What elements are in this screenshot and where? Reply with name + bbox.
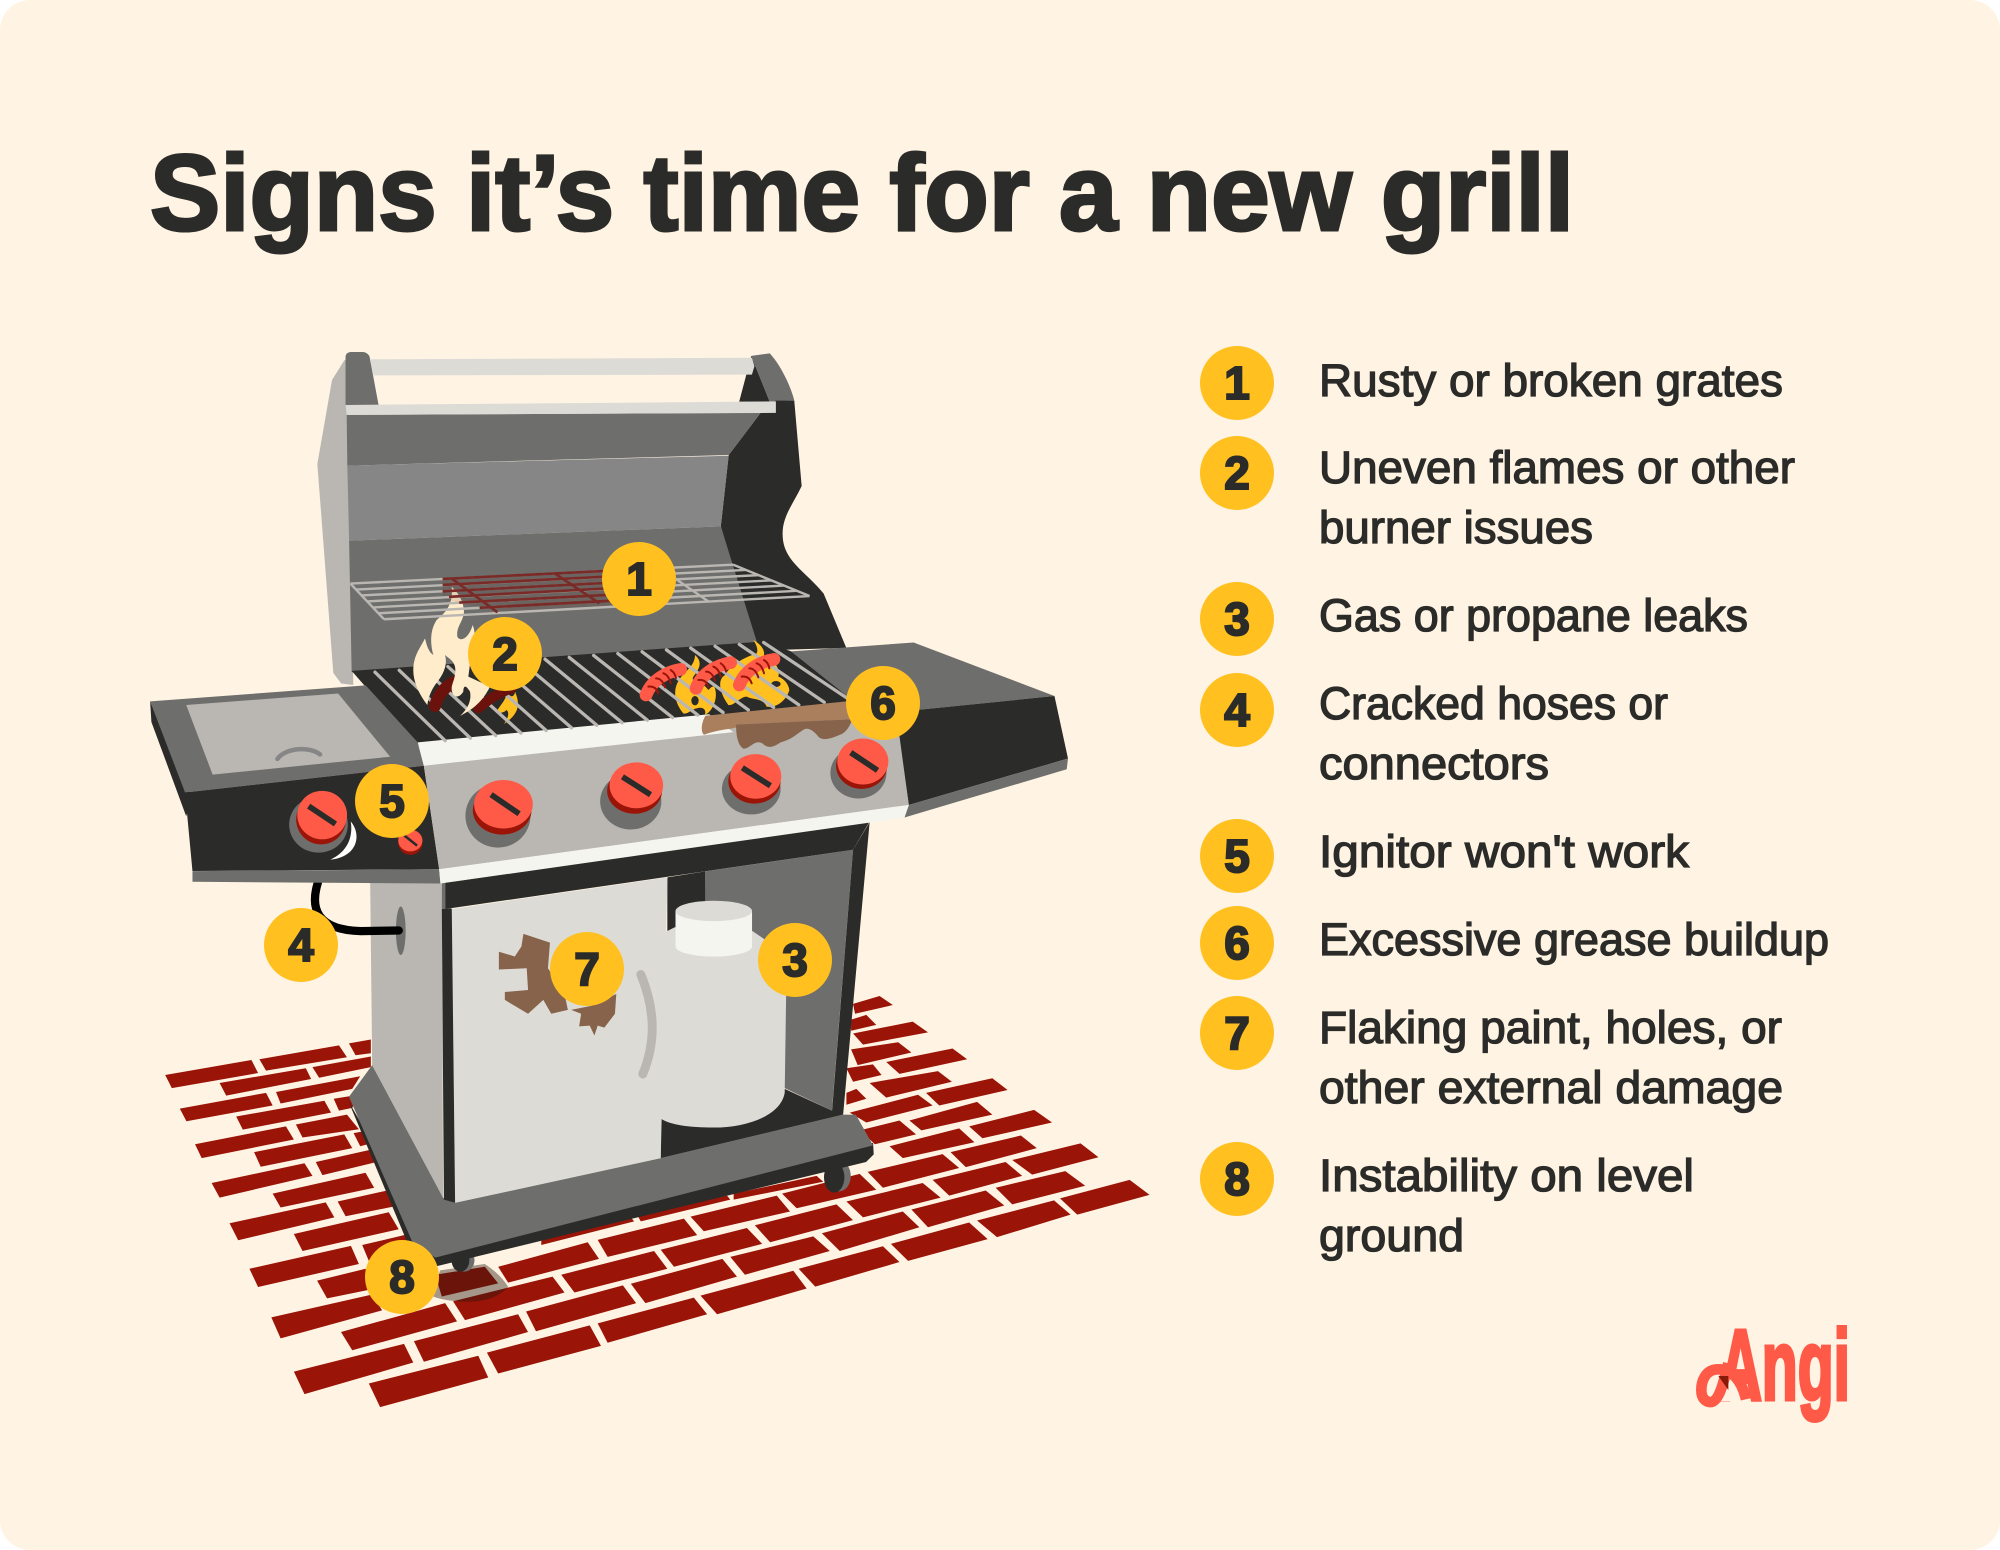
list item 8: ground <box>1319 1210 1464 1261</box>
list item 2: Uneven flames or other <box>1319 442 1795 493</box>
cabinet interior <box>661 822 870 1158</box>
list item 4: Cracked hoses or <box>1319 678 1668 729</box>
propane tank <box>641 901 787 1128</box>
list item 4: 4 <box>1224 684 1250 736</box>
ignitor spark arc <box>330 821 357 860</box>
list item 6 <box>1200 906 1829 980</box>
frame bar <box>445 821 870 909</box>
list item 5: 5 <box>1224 830 1250 882</box>
list item 4: connectors <box>1319 738 1549 789</box>
list item 3: 3 <box>1224 593 1250 645</box>
sausages <box>435 659 774 708</box>
grill lid <box>317 352 846 685</box>
caster shadow <box>432 1264 508 1302</box>
list item 2: 2 <box>1224 447 1250 499</box>
grease buildup <box>702 701 852 749</box>
grate bars <box>375 642 849 741</box>
cabinet side panel <box>370 880 455 1203</box>
knob <box>600 762 663 829</box>
flaking paint damage <box>499 934 616 1036</box>
number badge 5 <box>355 764 429 838</box>
number badge 2: 2 <box>492 628 518 680</box>
left side shelf <box>150 685 440 884</box>
sausage three <box>739 659 774 685</box>
list item 1: Rusty or broken grates <box>1319 355 1783 406</box>
list item 6: 6 <box>1224 917 1250 969</box>
list item 1: 1 <box>1224 357 1250 409</box>
Angi logo: Angi <box>1719 1309 1850 1421</box>
number badge 1 <box>602 542 676 616</box>
brick patio <box>165 996 1150 1407</box>
sausage one <box>646 669 681 695</box>
number badge 1: 1 <box>626 553 652 605</box>
list item 8 <box>1200 1142 1694 1261</box>
list item 7: other external damage <box>1319 1062 1783 1113</box>
knob <box>465 780 533 848</box>
list item 3 <box>1200 582 1748 656</box>
Angi logo <box>1701 1309 1850 1421</box>
number badge 4: 4 <box>288 919 314 971</box>
cart base <box>348 1065 874 1267</box>
number badge 5: 5 <box>379 775 405 827</box>
number badge 2 <box>468 617 542 691</box>
right side shelf <box>791 642 1068 817</box>
number badge 4 <box>264 908 338 982</box>
gas hose <box>315 883 399 931</box>
number badge 7: 7 <box>574 943 600 995</box>
control panel <box>418 705 909 884</box>
list item 4 <box>1200 673 1668 789</box>
list item 6: Excessive grease buildup <box>1319 914 1829 965</box>
list item 3: Gas or propane leaks <box>1319 590 1748 641</box>
burnt sausages <box>435 681 512 708</box>
list item 5 <box>1200 819 1690 893</box>
knob <box>830 739 888 798</box>
control knobs <box>289 739 888 860</box>
number badge 7 <box>550 932 624 1006</box>
knob <box>289 791 348 853</box>
grill illustration <box>150 352 1068 1302</box>
list item 7: Flaking paint, holes, or <box>1319 1002 1782 1053</box>
uneven cream flame <box>413 587 490 716</box>
list item 5: Ignitor won't work <box>1319 826 1690 877</box>
broken ignitor button <box>398 830 422 855</box>
number badge 8: 8 <box>389 1251 415 1303</box>
number badge 8 <box>365 1240 439 1314</box>
list item 2 <box>1200 436 1795 553</box>
number badge 6 <box>846 666 920 740</box>
cabinet door <box>452 877 667 1203</box>
upper warming rack <box>350 565 810 619</box>
number badge 3 <box>758 923 832 997</box>
knob <box>722 754 781 814</box>
list item 7 <box>1200 996 1783 1113</box>
list item 7: 7 <box>1224 1007 1250 1059</box>
yellow flames <box>497 640 789 724</box>
casters <box>452 1161 851 1272</box>
number badge 3: 3 <box>782 934 808 986</box>
list item 8: 8 <box>1224 1153 1250 1205</box>
sausage two <box>696 663 731 688</box>
rusty grate section <box>443 571 614 612</box>
list item 1 <box>1200 346 1783 420</box>
cooking chamber <box>352 641 855 746</box>
title: Signs it’s time for a new grill <box>150 132 1574 253</box>
number badge 6: 6 <box>870 677 896 729</box>
list item 2: burner issues <box>1319 502 1593 553</box>
list item 8: Instability on level <box>1319 1150 1694 1201</box>
